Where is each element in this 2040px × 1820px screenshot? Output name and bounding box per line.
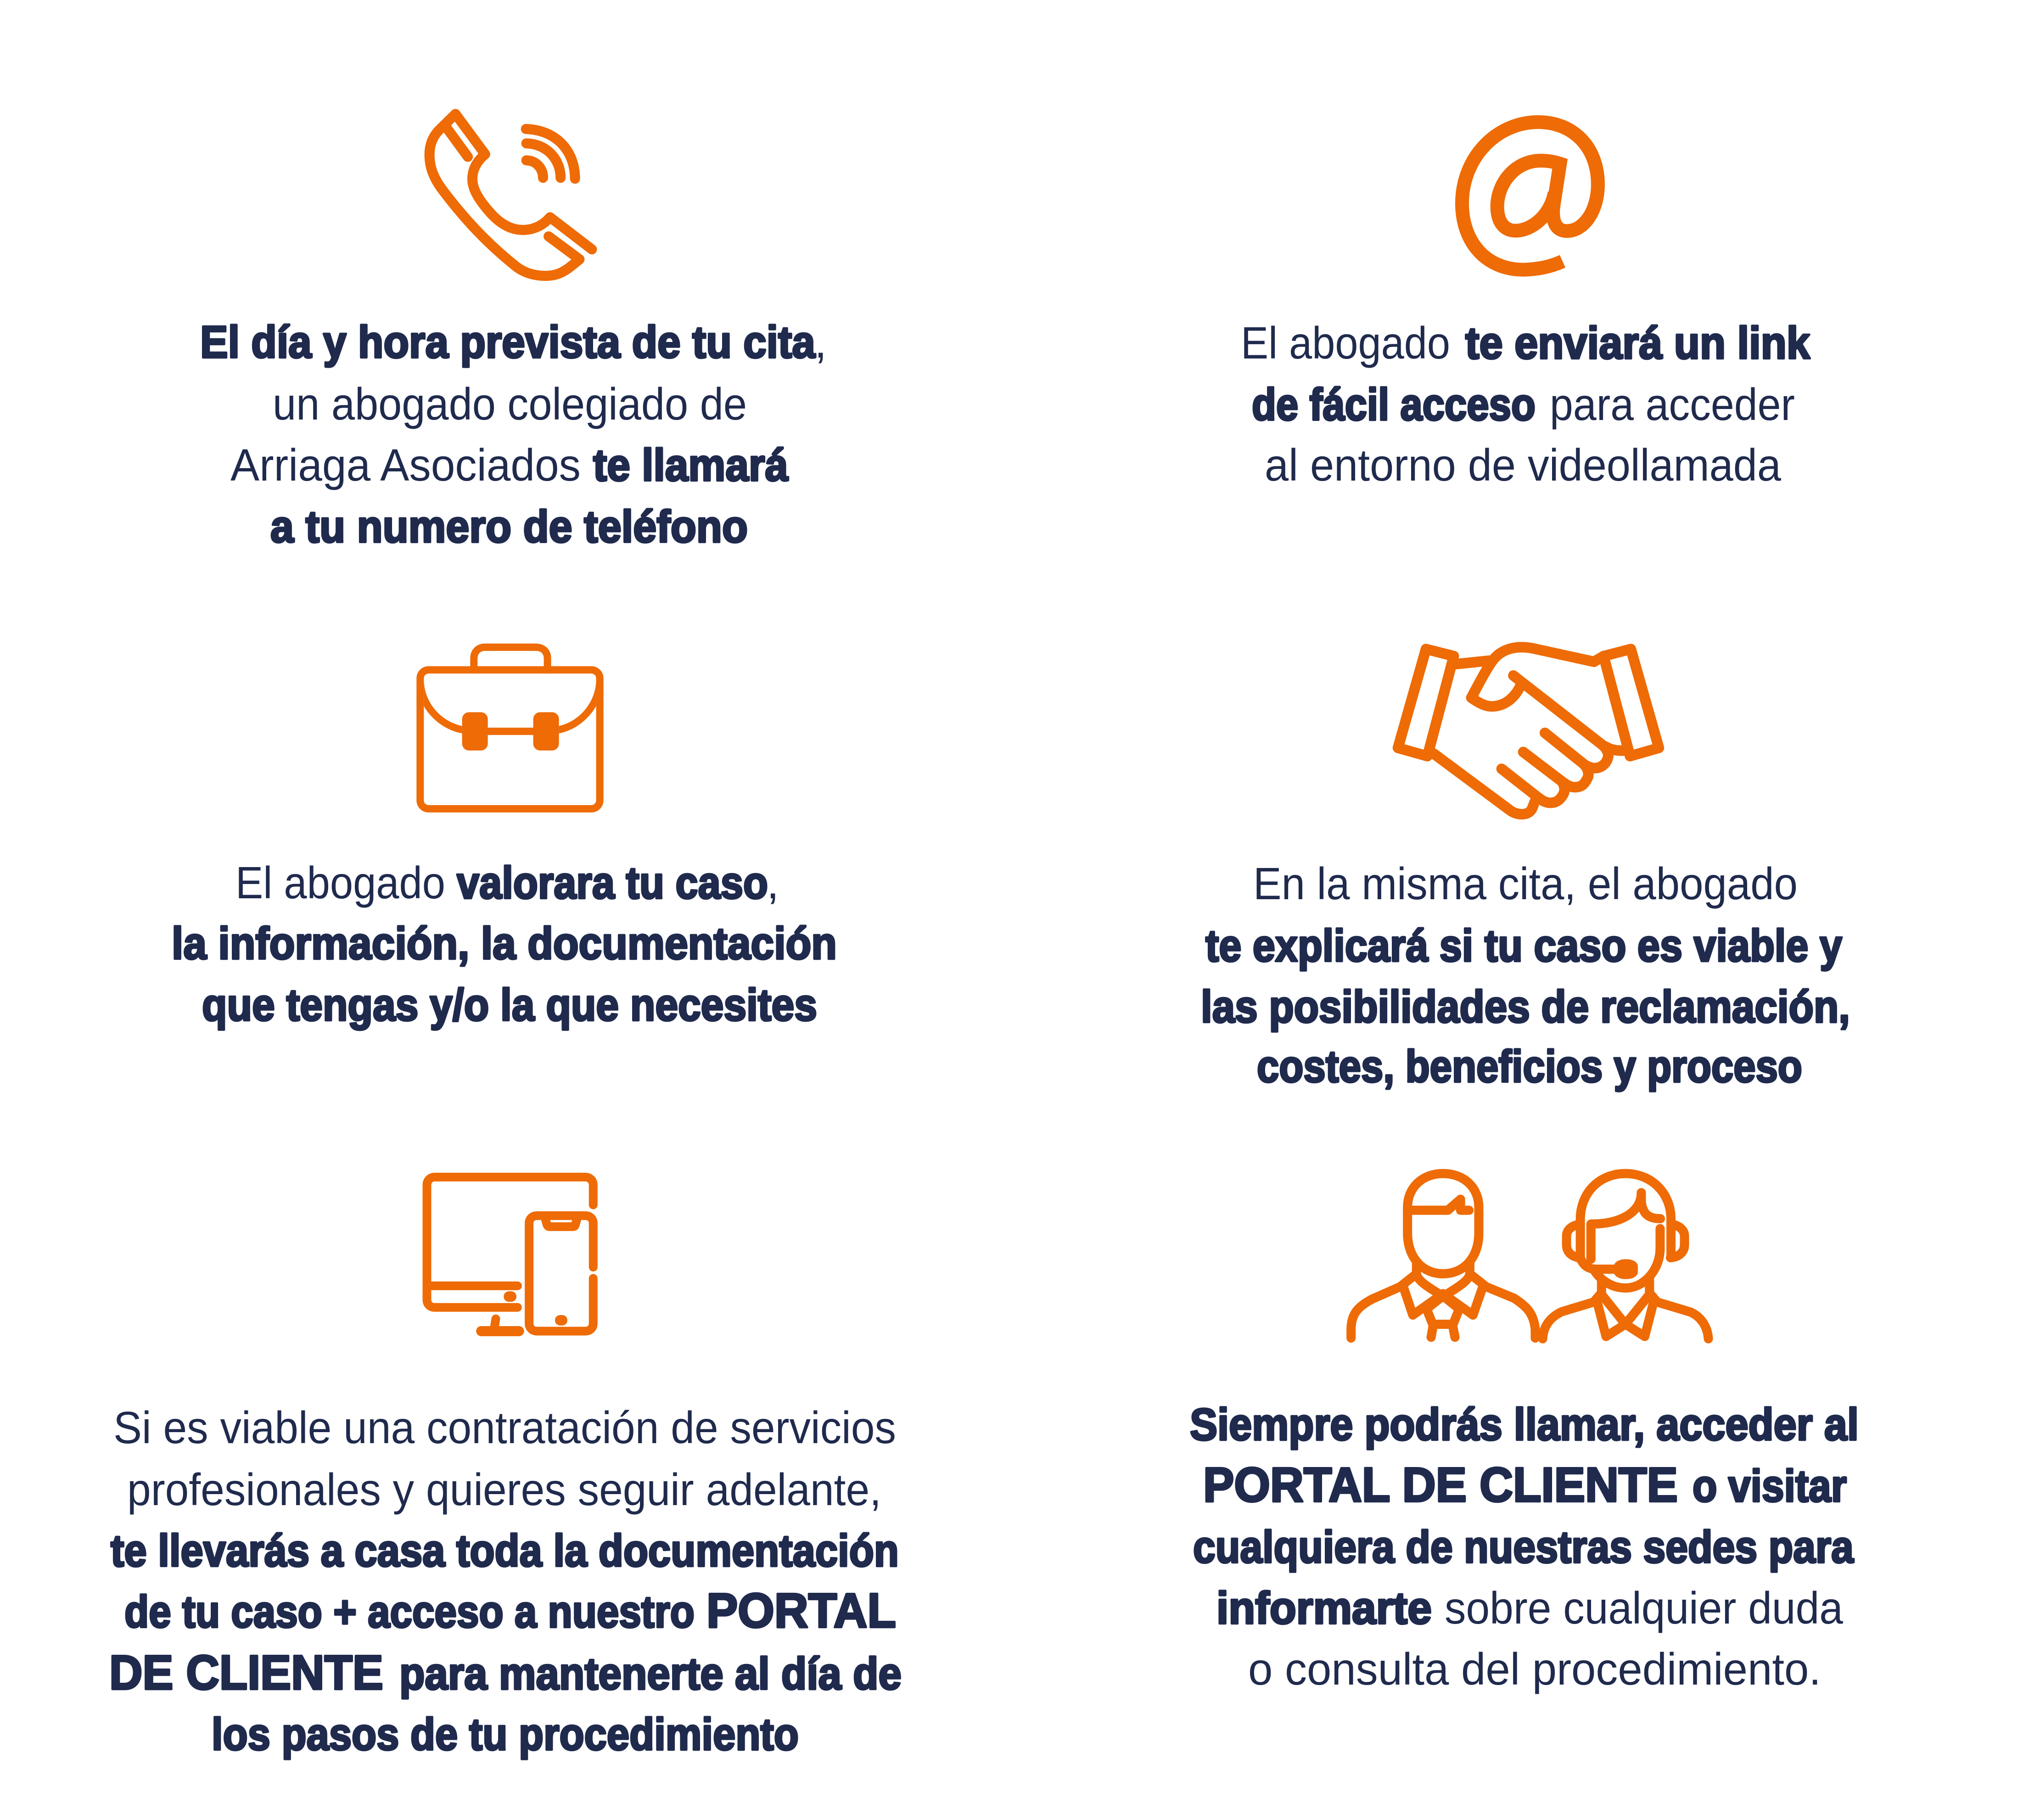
text: case assessment step: ,: [767, 857, 779, 908]
text: phone call step: [200, 317, 827, 552]
text: client portal step: sobre cualquier duda: [1445, 1583, 1843, 1633]
text: phone call step: Arriaga Asociados: [230, 440, 581, 490]
text: video call link step: te enviará un link: [1465, 318, 1810, 368]
text: video call link step: El abogado: [1241, 318, 1450, 368]
text: client portal step: PORTAL DE CLIENTE: [1203, 1458, 1678, 1512]
text: video call link step: para acceder: [1550, 379, 1795, 430]
text: case assessment step: El abogado: [235, 857, 445, 908]
text: contract and documentation step: PORTAL: [706, 1584, 896, 1638]
text: client portal step: [1190, 1399, 1859, 1694]
text: phone call step: El día y hora prevista de tu cita: [200, 317, 816, 367]
icon: monitor and smartphone: [427, 1177, 593, 1331]
text: client portal step: informarte: [1216, 1583, 1432, 1633]
text: legal explanation step: [1201, 858, 1850, 1092]
text: contract and documentation step: para mantenerte al día de: [399, 1648, 902, 1699]
text: legal explanation step: costes, beneficios y proceso: [1257, 1041, 1802, 1092]
text: contract and documentation step: Si es viable una contratación de servicios: [113, 1402, 896, 1453]
text: contract and documentation step: te llevarás a casa toda la documentación: [111, 1525, 899, 1576]
text: phone call step: te llamará: [593, 440, 788, 490]
text: case assessment step: que tengas y/o la que necesites: [202, 980, 817, 1030]
text: phone call step: un abogado colegiado de: [273, 379, 747, 429]
text: case assessment step: [172, 857, 837, 1030]
text: contract and documentation step: profesionales y quieres seguir adelante,: [127, 1464, 881, 1515]
text: contract and documentation step: de tu caso + acceso a nuestro: [124, 1586, 695, 1637]
icon: lawyer and support agent with headset: [1351, 1174, 1709, 1339]
text: client portal step: o consulta del procedimiento.: [1248, 1644, 1821, 1694]
text: case assessment step: la información, la documentación: [172, 918, 837, 969]
text: case assessment step: valorara tu caso: [457, 857, 768, 908]
text: phone call step: ,: [814, 317, 827, 367]
icon: briefcase: [420, 647, 600, 809]
icon: at sign: [1462, 122, 1598, 270]
icon: telephone handset: [430, 114, 592, 276]
text: legal explanation step: las posibilidades de reclamación,: [1201, 981, 1850, 1032]
text: client portal step: Siempre podrás llamar, acceder al: [1190, 1399, 1859, 1450]
text: contract and documentation step: los pasos de tu procedimiento: [212, 1709, 799, 1759]
text: video call link step: de fácil acceso: [1252, 379, 1536, 430]
text: legal explanation step: En la misma cita, el abogado: [1253, 858, 1798, 909]
text: phone call step: a tu numero de teléfono: [270, 501, 748, 552]
text: client portal step: cualquiera de nuestras sedes para: [1193, 1522, 1854, 1572]
text: contract and documentation step: DE CLIENTE: [109, 1646, 383, 1700]
text: video call link step: [1241, 318, 1810, 490]
text: client portal step: o visitar: [1693, 1461, 1847, 1511]
text: legal explanation step: te explicará si tu caso es viable y: [1205, 920, 1842, 971]
text: contract and documentation step: [109, 1402, 902, 1759]
icon: handshake: [1398, 647, 1659, 814]
text: video call link step: al entorno de videollamada: [1265, 440, 1781, 490]
